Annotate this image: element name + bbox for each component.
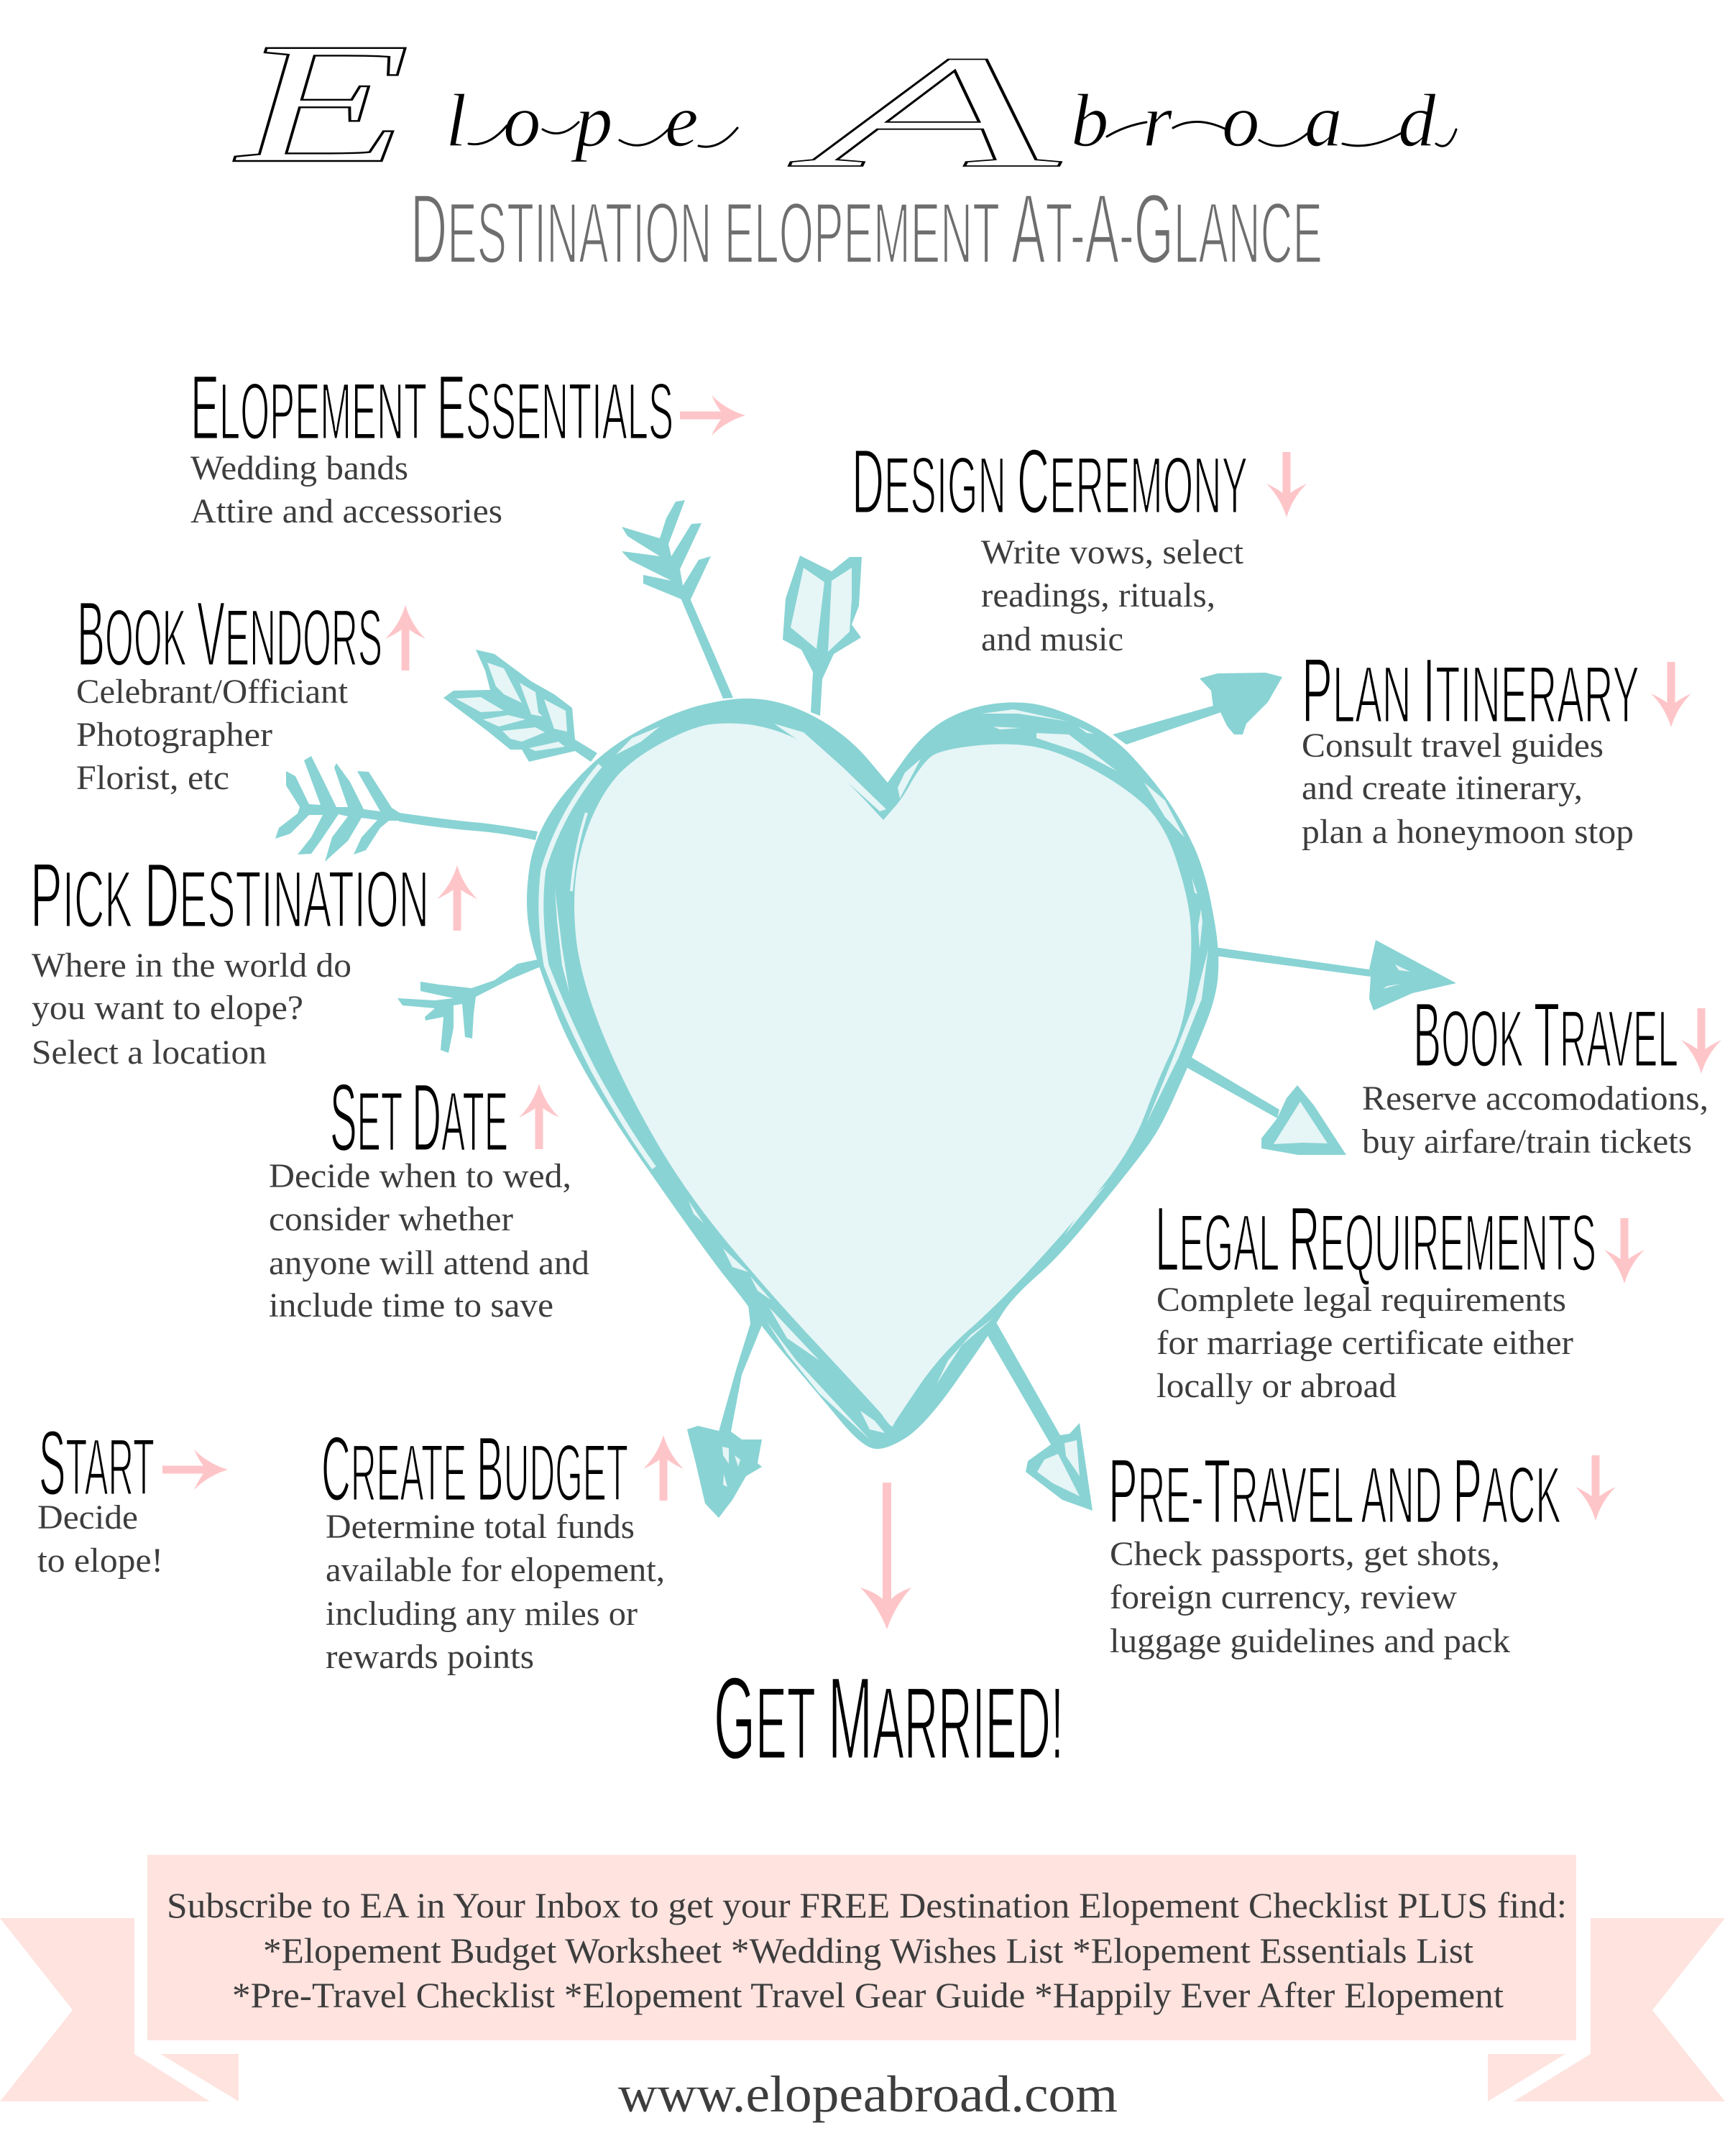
arrow: [643, 1435, 684, 1501]
step: book travel: [1362, 984, 1721, 1161]
heart outline: [527, 699, 1218, 1449]
arrow: bottom right: [986, 1322, 1092, 1511]
arrow: feather left: [275, 756, 538, 862]
banner text: *Pre-Travel Checklist *Elopement Travel Gear Guide *Happily Ever After Elopement: [232, 1975, 1504, 2015]
arrow: leaf top: [783, 556, 862, 716]
description: and music: [981, 620, 1123, 658]
description: Write vows, select: [981, 533, 1244, 571]
arrow: [1604, 1218, 1644, 1284]
description: anyone will attend and: [269, 1244, 589, 1282]
description: Wedding bands: [190, 449, 408, 487]
heart fill: [574, 723, 1191, 1427]
description: Celebrant/Officiant: [76, 673, 349, 711]
description: Check passports, get shots,: [1110, 1535, 1500, 1573]
heading: PRE-TRAVEL AND PACK: [1108, 1440, 1561, 1543]
arrow: triangle right: [1182, 1055, 1346, 1155]
description: including any miles or: [326, 1595, 638, 1633]
description: Determine total funds: [326, 1508, 635, 1546]
description: Florist, etc: [76, 759, 229, 797]
description: Reserve accomodations,: [1362, 1079, 1708, 1118]
arrow: [437, 865, 477, 931]
description: buy airfare/train tickets: [1362, 1123, 1692, 1161]
heading: START: [39, 1412, 155, 1515]
step: legal requirements: [1155, 1188, 1644, 1405]
description: Complete legal requirements: [1156, 1281, 1566, 1319]
title: [234, 7, 1456, 201]
description: to elope!: [37, 1542, 163, 1580]
step: start: [37, 1412, 228, 1580]
description: consider whether: [269, 1200, 513, 1238]
arrow: bottom left: [687, 1305, 762, 1518]
heading: SET DATE: [330, 1064, 508, 1171]
step: get married: [714, 1483, 1064, 1784]
ribbon fold right: [1488, 2054, 1565, 2101]
title text: broad: [1071, 78, 1436, 162]
description: Decide when to wed,: [269, 1157, 571, 1195]
banner ribbon: [0, 1855, 1725, 2101]
step: book vendors: [76, 583, 426, 797]
arrow: small feather left: [397, 958, 545, 1053]
title text: A: [788, 22, 1062, 201]
description: Decide: [37, 1498, 138, 1537]
arrow: [680, 395, 745, 436]
heading: PICK DESTINATION: [30, 844, 429, 947]
step: plan itinerary: [1302, 640, 1691, 851]
description: rewards points: [326, 1638, 534, 1676]
description: available for elopement,: [326, 1551, 665, 1589]
description: Where in the world do: [32, 946, 351, 985]
banner panel: [147, 1855, 1576, 2040]
ribbon tail left: [0, 1918, 210, 2101]
heading: BOOK VENDORS: [77, 583, 382, 686]
title text: E: [234, 7, 410, 198]
arrow: [860, 1483, 911, 1629]
banner text: *Elopement Budget Worksheet *Wedding Wishes List *Elopement Essentials List: [263, 1930, 1473, 1971]
step: design ceremony: [852, 430, 1307, 658]
arrow: [1651, 662, 1691, 727]
description: for marriage certificate either: [1156, 1324, 1573, 1362]
website url: www.elopeabroad.com: [618, 2065, 1118, 2123]
arrow: [385, 605, 426, 671]
description: readings, rituals,: [981, 576, 1215, 614]
heading: GET MARRIED!: [714, 1652, 1064, 1784]
heading: DESIGN CEREMONY: [852, 430, 1248, 533]
description: foreign currency, review: [1110, 1578, 1457, 1616]
arrow: feather top-left: [622, 500, 733, 699]
step: pre-travel and pack: [1108, 1440, 1616, 1660]
step: set date: [269, 1064, 589, 1325]
arrow: [1576, 1455, 1616, 1521]
description: Photographer: [76, 716, 272, 754]
step: create budget: [321, 1418, 684, 1676]
step: pick destination: [30, 844, 477, 1072]
ribbon fold left: [160, 2054, 239, 2101]
description: Consult travel guides: [1302, 727, 1604, 765]
subtitle: DESTINATION ELOPEMENT AT-A-GLANCE: [410, 174, 1322, 285]
ribbon tail right: [1514, 1918, 1725, 2101]
arrow: book travel: [1215, 940, 1456, 1010]
title flourish: [469, 121, 1456, 147]
arrow: [1266, 452, 1307, 517]
heading: CREATE BUDGET: [321, 1418, 628, 1521]
description: locally or abroad: [1156, 1367, 1397, 1405]
heart with arrows: [275, 500, 1456, 1518]
heart sketch highlights: [541, 709, 1208, 1439]
arrow: leaf left-top: [443, 650, 597, 762]
description: you want to elope?: [32, 989, 303, 1027]
banner text: Subscribe to EA in Your Inbox to get your FREE Destination Elopement Checklist PLUS find:: [167, 1885, 1567, 1925]
description: and create itinerary,: [1302, 769, 1583, 807]
arrow: plan itinerary: [1113, 673, 1282, 745]
description: Attire and accessories: [190, 492, 502, 530]
description: include time to save: [269, 1286, 553, 1325]
arrow: [162, 1450, 228, 1490]
step: elopement essentials: [190, 356, 745, 530]
description: plan a honeymoon stop: [1302, 813, 1634, 851]
description: luggage guidelines and pack: [1110, 1622, 1510, 1660]
title text: lope: [446, 78, 699, 162]
arrow: [1681, 1008, 1721, 1074]
arrow: [519, 1084, 559, 1149]
description: Select a location: [32, 1033, 267, 1072]
heading: ELOPEMENT ESSENTIALS: [190, 356, 673, 459]
